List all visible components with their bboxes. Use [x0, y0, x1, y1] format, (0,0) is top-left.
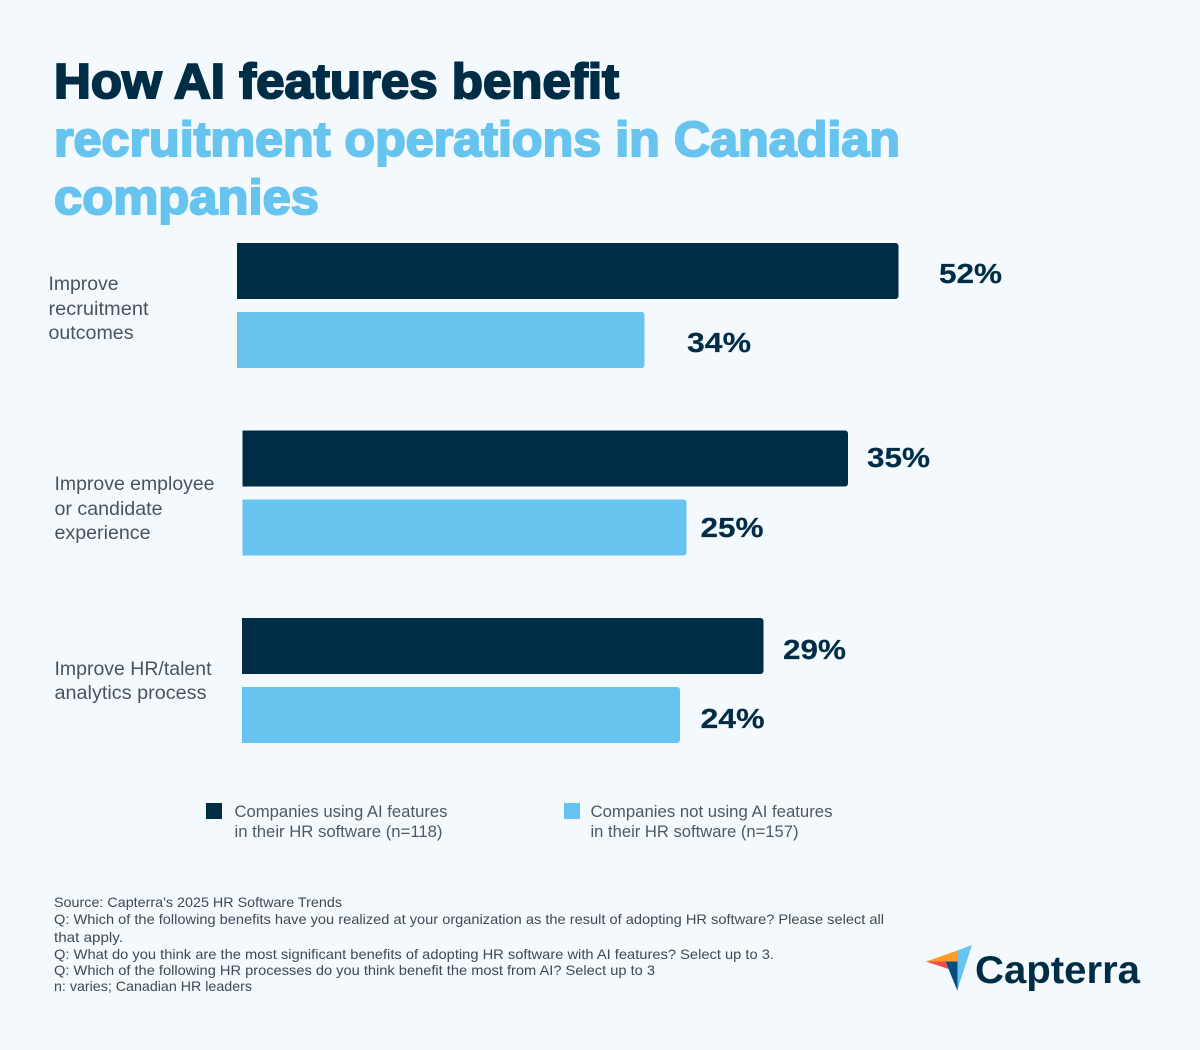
source notes: Q: Which of the following benefits have you realized at your organization as the result of adopting HR software? Please select all [54, 911, 884, 927]
category label: improve employee or candidate experience: experience [54, 522, 150, 544]
bar group: improve HR/talent analytics process [54, 618, 846, 743]
bar: 52% using AI [237, 243, 898, 299]
category label: improve HR/talent analytics process [54, 658, 212, 704]
title: companies [54, 171, 319, 225]
category label: improve employee or candidate experience: Improve employee [54, 473, 214, 495]
value: 29%: 29% [783, 634, 846, 665]
bar group: improve employee or candidate experience [54, 430, 930, 556]
value: 25%: 25% [700, 512, 764, 543]
source notes: Q: Which of the following HR processes do you think benefit the most from AI? Select up to 3 [54, 962, 655, 978]
legend: companies not using AI features: in their HR software (n=157) [590, 823, 798, 841]
bar: 29% using AI [242, 618, 764, 674]
title: How AI features benefit [54, 55, 619, 109]
source notes: n: varies; Canadian HR leaders [54, 978, 252, 994]
value: 34%: 34% [687, 327, 751, 358]
bar: 34% not using AI [237, 312, 644, 368]
legend: companies using AI features: Companies using AI features [234, 803, 448, 821]
bar group: improve recruitment outcomes [48, 243, 1002, 368]
title [54, 55, 900, 225]
category label: improve employee or candidate experience [54, 473, 214, 544]
legend: companies not using AI features: Companies not using AI features [590, 803, 832, 821]
legend: companies not using AI features [564, 803, 832, 841]
source notes: Q: What do you think are the most significant benefits of adopting HR software with AI features? Select up to 3. [54, 946, 774, 962]
wordmark: Capterra [975, 949, 1140, 992]
value: 24%: 24% [700, 703, 765, 734]
category label: improve HR/talent analytics process: analytics process [54, 682, 207, 704]
category label: improve recruitment outcomes: recruitment [48, 298, 149, 320]
icon: Capterra arrow [926, 945, 972, 991]
legend: companies using AI features: in their HR software (n=118) [234, 823, 442, 841]
bar: 24% not using AI [242, 687, 680, 743]
source notes [54, 894, 884, 994]
category label: improve recruitment outcomes: Improve [48, 273, 118, 295]
value: 52%: 52% [939, 258, 1002, 289]
category label: improve employee or candidate experience: or candidate [54, 498, 162, 520]
legend: companies using AI features [206, 803, 448, 841]
category label: improve HR/talent analytics process: Improve HR/talent [54, 658, 212, 680]
title: recruitment operations in Canadian [54, 113, 900, 167]
category label: improve recruitment outcomes [48, 273, 149, 344]
source notes: that apply. [54, 929, 123, 945]
source notes: Source: Capterra's 2025 HR Software Trends [54, 894, 342, 910]
bar: 35% using AI [242, 430, 848, 486]
value: 35%: 35% [867, 442, 930, 473]
bar: 25% not using AI [242, 500, 686, 556]
category label: improve recruitment outcomes: outcomes [48, 322, 134, 344]
logo: Capterra [926, 945, 1140, 992]
